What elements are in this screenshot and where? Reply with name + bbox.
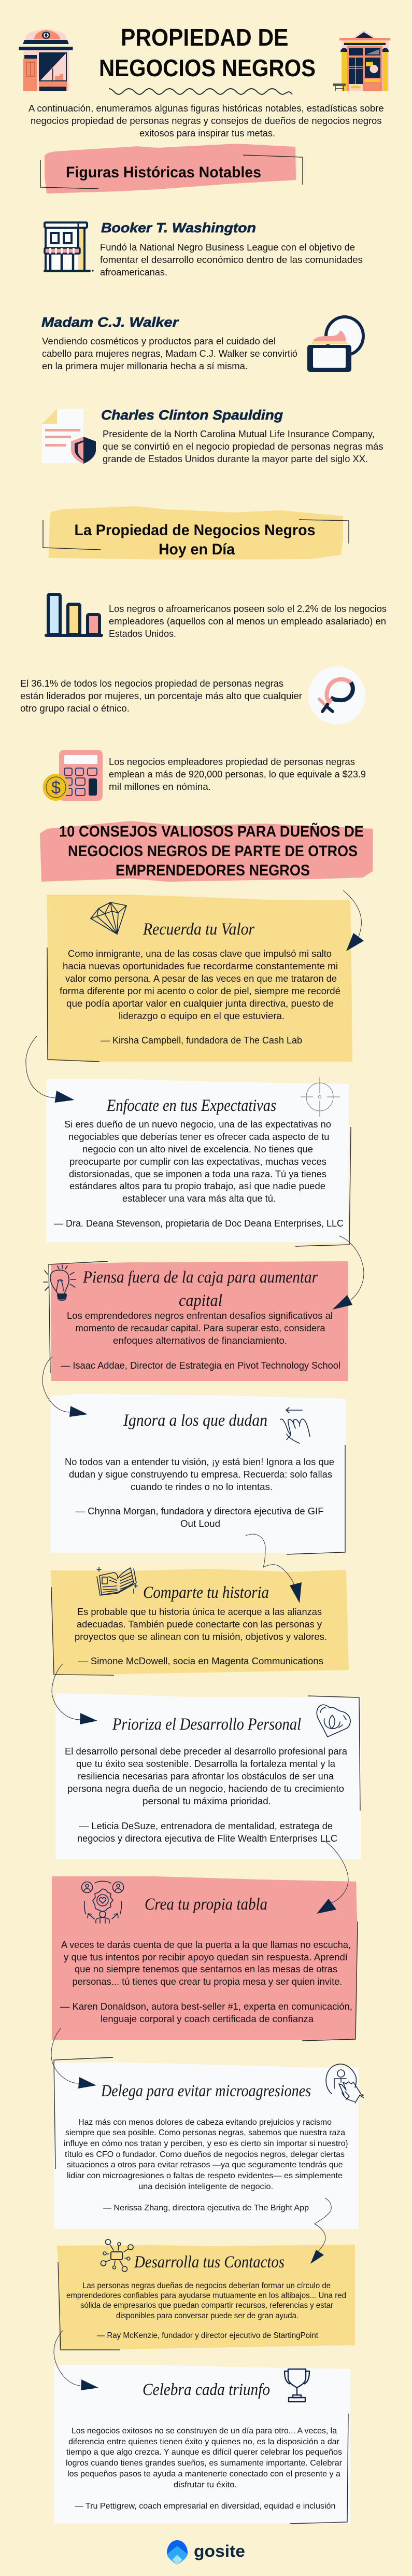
description: Vendiendo cosméticos y productos para el cuidado del xyxy=(42,336,276,346)
tip text: proyectos que se alinean con tu misión, objetivos y valores. xyxy=(75,1632,327,1642)
tip text: los pequeños pasos te ayuda a mantenerte conectado con el presente y a xyxy=(67,2470,340,2478)
panel: tip 3 piensa fuera de la caja xyxy=(44,1261,348,1381)
tip text: y que tus intentos por recibir apoyo quedan sin respuesta. Aprendí xyxy=(64,1952,348,1962)
tip text: negocios y directora ejecutiva de Flite Wealth Enterprises LLC xyxy=(77,1833,337,1844)
tip text: — Leticia DeSuze, entrenadora de mentalidad, estratega de xyxy=(79,1821,333,1831)
tip text: Las personas negras dueñas de negocios deberían formar un círculo de xyxy=(82,2281,331,2290)
panel: tip 5 comparte tu historia xyxy=(51,1567,349,1675)
icon: building xyxy=(44,222,94,272)
icon: heart with lotus xyxy=(317,1705,350,1737)
tip text: Es probable que tu historia única te acerque a las alianzas xyxy=(77,1607,322,1617)
description: en la primera mujer millonaria hecha a sí misma. xyxy=(42,361,248,371)
stat text xyxy=(20,678,302,714)
stat text: están liderados por mujeres, un porcentaje más alto que cualquier xyxy=(20,691,302,701)
tip title: Prioriza el Desarrollo Personal xyxy=(112,1715,301,1734)
tip text: — Kirsha Campbell, fundadora de The Cash Lab xyxy=(101,1035,302,1046)
tip text: Como inmigrante, una de las cosas clave que impulsó mi salto xyxy=(68,949,332,959)
tip title: Celebra cada triunfo xyxy=(143,2380,270,2399)
name: Booker T. Washington xyxy=(101,220,256,235)
arrow: tip 4 to 5 xyxy=(246,1534,302,1603)
arrow: tip 9 to 10 xyxy=(54,2330,98,2390)
description: fomentar el desarrollo económico dentro de las comunidades xyxy=(100,255,363,265)
tip text: liderazgo o equipo en el que estuviera. xyxy=(119,1011,285,1021)
section heading: 10 consejos: NEGOCIOS NEGROS DE PARTE DE OTROS xyxy=(68,843,358,860)
tip text: Out Loud xyxy=(180,1519,220,1529)
tip text: situaciones a otros para evitar retrasos —ya que seguramente tendrás que xyxy=(67,2161,343,2169)
tip text: logros cuando tienes grandes sueños, es sumamente importante. Celebrar xyxy=(66,2459,343,2468)
wave divider xyxy=(109,89,292,94)
icon: logo pin xyxy=(167,2540,188,2565)
logo: gosite xyxy=(167,2540,245,2565)
tip text: Haz más con menos dolores de cabeza evitando prejuicios y racismo xyxy=(78,2118,332,2127)
name: Madam C.J. Walker xyxy=(41,314,179,330)
tip text xyxy=(66,2281,346,2340)
stat text: empleadores (aquellos con al menos un empleado asalariado) en xyxy=(109,616,386,626)
icon: calculator and coin xyxy=(42,750,103,801)
tip text: disfrutar tu éxito. xyxy=(174,2481,237,2489)
tip title: Comparte tu historia xyxy=(143,1583,269,1602)
icon: people and gear xyxy=(82,1881,123,1923)
tip title: Recuerda tu Valor xyxy=(143,920,254,939)
section heading: 10 consejos: 10 CONSEJOS VALIOSOS PARA DUEÑOS DE xyxy=(59,823,364,840)
title: NEGOCIOS NEGROS xyxy=(99,54,316,81)
arrow: tip 7 to 8 xyxy=(51,2028,96,2088)
icon: cream jar and mirror xyxy=(307,317,363,372)
tip text xyxy=(65,1746,348,1844)
tip text: Si eres dueño de un nuevo negocio, una de las expectativas no xyxy=(64,1119,331,1130)
panel: tip 7 crea tu propia tabla xyxy=(52,1876,358,2041)
description xyxy=(42,336,297,371)
tip text: título es CFO o fundador. Como dueños de negocios negros, delegar ciertas xyxy=(65,2150,345,2159)
section heading: figuras históricas: Figuras Históricas Notables xyxy=(66,164,261,181)
tip text: distorsionadas, que se imponen a toda una raza. Tú ya tienes xyxy=(69,1169,326,1179)
stat text: emplean a más de 920,000 personas, lo que equivale a $23.9 xyxy=(109,769,366,779)
tip text: negocio con un alto nivel de excelencia. No tienes que xyxy=(82,1144,313,1154)
tip title: Delega para evitar microagresiones xyxy=(101,2082,311,2100)
tip text: preocuparte por cumplir con las expectativas, muchas veces xyxy=(69,1157,326,1167)
arrow: tip 8 to 9 xyxy=(310,2198,331,2264)
name: Charles Clinton Spaulding xyxy=(101,407,283,423)
tip text: hacia nuevas oportunidades fue recordarme constantemente mi xyxy=(63,961,338,971)
tip text: influye en cómo nos tratan y perciben, y eso es cierto sin importar si nuestro} xyxy=(64,2139,349,2148)
panel: tip 9 desarrolla tus contactos xyxy=(57,2239,355,2350)
tip text: — Dra. Deana Stevenson, propietaria de Doc Deana Enterprises, LLC xyxy=(54,1218,344,1229)
tip text: estándares altos para tu propio trabajo, así que nadie puede xyxy=(69,1181,325,1191)
section heading: 10 consejos xyxy=(40,821,373,882)
tip text: enfoques alternativos de financiamiento. xyxy=(113,1335,287,1346)
icon: diamond xyxy=(91,902,126,934)
description: cabello para mujeres negras, Madam C.J. Walker se convirtió xyxy=(42,349,297,359)
stat: 920,000 xyxy=(42,750,366,801)
arrow: tip 3 to 4 xyxy=(42,1357,88,1417)
tip title: Crea tu propia tabla xyxy=(145,1895,267,1914)
tip text: — Karen Donaldson, autora best-seller #1, experta en comunicación, xyxy=(60,2001,352,2012)
tip text: lenguaje corporal y coach certificada de confianza xyxy=(101,2014,314,2024)
panel: tip 8 delega xyxy=(54,2057,364,2229)
section heading: hoy en día: Hoy en Día xyxy=(159,541,235,558)
description: Presidente de la North Carolina Mutual Life Insurance Company, xyxy=(103,429,375,439)
panel: tip 4 ignora a los que dudan xyxy=(51,1394,346,1554)
tip text: diferencia entre quienes tienen éxito y quienes no, es la disposición a dar xyxy=(68,2438,340,2446)
icon: bar chart xyxy=(45,594,103,637)
icon: crosshair xyxy=(301,1077,340,1117)
tip text: establecer una vara más alta que tú. xyxy=(122,1193,276,1204)
tip text: — Isaac Addae, Director de Estrategia en Pivot Technology School xyxy=(61,1360,340,1371)
tip text: — Nerissa Zhang, directora ejecutiva de The Bright App xyxy=(103,2204,309,2212)
stat text: Los negocios empleadores propiedad de personas negras xyxy=(109,757,355,767)
tip text: — Chynna Morgan, fundadora y directora ejecutiva de GIF xyxy=(76,1506,323,1516)
tip text: tiempo a que algo crezca. Y aunque es difícil querer celebrar los pequeños xyxy=(66,2448,342,2457)
tip text xyxy=(75,1607,327,1666)
tip text: que no siempre tenemos que sentarnos en las mesas de otras xyxy=(75,1964,337,1974)
icon: left storefront xyxy=(19,29,73,91)
tip text: valor como persona. A pesar de las veces en que me trataron de xyxy=(65,973,337,984)
stat text: El 36.1% de todos los negocios propiedad de personas negras xyxy=(20,678,283,689)
panel: Booker T. Washington xyxy=(44,220,363,277)
intro text: A continuación, enumeramos algunas figuras históricas notables, estadísticas sobre xyxy=(29,103,384,114)
tip title: Enfocate en tus Expectativas xyxy=(106,1096,276,1115)
tip text: negociables que deberías tener es ofrecer cada aspecto de tu xyxy=(68,1132,330,1142)
panel: tip 2 enfócate xyxy=(46,1077,351,1246)
tip text: Los emprendedores negros enfrentan desafíos significativos al xyxy=(67,1311,333,1321)
tip text xyxy=(65,1457,334,1529)
tip text: — Ray McKenzie, fundador y director ejecutivo de StartingPoint xyxy=(97,2331,319,2340)
intro text: exitosos para inspirar tus metas. xyxy=(139,128,275,138)
description xyxy=(103,429,383,464)
arrow: tip 6 to 7 xyxy=(317,1841,348,1914)
tip text: resiliencia necesarias para afrontar los obstáculos de ser una xyxy=(78,1771,334,1781)
stat text xyxy=(109,757,366,792)
tip text: siempre que sea posible. Como personas negras, sabemos que nuestra raza xyxy=(65,2128,345,2137)
icon: light bulb xyxy=(44,1265,76,1301)
tip text: disponibles para conversar puede ser de gran ayuda. xyxy=(116,2312,299,2320)
stat text: otro grupo racial o étnico. xyxy=(20,703,130,714)
icon: right storefront xyxy=(333,30,390,91)
intro text: negocios propiedad de personas negras y consejos de dueños de negocios negros xyxy=(31,116,381,126)
title: PROPIEDAD DE xyxy=(121,24,288,51)
tip text xyxy=(66,2427,343,2511)
icon: pointing hand xyxy=(280,1408,310,1443)
tip text: emprendedores confiables para ayudarse mutuamente en los altibajos... Una red xyxy=(66,2291,346,2300)
stat text: Los negros o afroamericanos poseen solo el 2.2% de los negocios xyxy=(109,604,387,614)
stat: 36.1% xyxy=(20,666,365,725)
tip text: lidiar con microagresiones o faltas de respeto evidentes— es simplemente xyxy=(67,2171,343,2180)
tip text: Los negocios exitosos no se construyen de un día para otro... A veces, la xyxy=(72,2427,337,2435)
tip title: Desarrolla tus Contactos xyxy=(134,2253,285,2272)
stat text xyxy=(109,604,387,639)
tip text: adecuadas. También puede conectarte con las personas y xyxy=(77,1619,322,1630)
arrow: tip 5 to 6 xyxy=(52,1664,97,1724)
tip title: Ignora a los que dudan xyxy=(123,1411,267,1430)
tip text: persona negra dueña de un negocio, haciendo de tu crecimiento xyxy=(67,1784,344,1794)
tip title: Piensa fuera de la caja para aumentar xyxy=(82,1268,318,1287)
tip text xyxy=(61,1311,340,1371)
tip text: momento de recaudar capital. Para superar esto, considera xyxy=(76,1323,325,1333)
arrow: tip 2 to 3 xyxy=(333,1236,364,1310)
panel: Madam C.J. Walker xyxy=(41,314,363,372)
title xyxy=(99,24,316,81)
description xyxy=(100,242,363,277)
header xyxy=(19,24,390,138)
icon: female symbol xyxy=(308,666,365,725)
section heading: figuras históricas xyxy=(40,144,303,193)
tip text: personas... tú tienes que crear tu propia mesa y ser quien invite. xyxy=(73,1976,342,1987)
tip text: sólida de empresarios que puedan compartir recursos, referencias y estar xyxy=(80,2301,333,2310)
icon: calculator and coin: $ xyxy=(51,778,61,798)
description: afroamericanas. xyxy=(100,267,167,277)
tip text: — Tru Pettigrew, coach empresarial en diversidad, equidad e inclusión xyxy=(75,2502,336,2511)
icon: open book xyxy=(97,1567,137,1595)
panel: tip 3 piensa fuera de la caja: capital xyxy=(179,1291,222,1310)
tip text: A veces te darás cuenta de que la puerta a la que llamas no escucha, xyxy=(61,1940,351,1950)
description: que se convirtió en el negocio propiedad de personas negras más xyxy=(103,441,383,452)
tip text: personal tu máxima prioridad. xyxy=(143,1796,271,1806)
stat text: mil millones en nómina. xyxy=(109,782,211,792)
icon: network xyxy=(101,2239,133,2272)
tip text: una decisión inteligente de negocio. xyxy=(138,2182,273,2191)
icon: document and shield xyxy=(42,409,96,464)
panel: tip 1 recuerda tu valor xyxy=(47,895,352,1062)
tip text: que podía aportar valor en cualquier junta directiva, puesto de xyxy=(66,998,334,1009)
tip text xyxy=(64,2118,349,2212)
tip text: No todos van a entender tu visión, ¡y está bien! Ignora a los que xyxy=(65,1457,334,1467)
stat: 2.2% xyxy=(45,594,387,639)
tip text: — Simone McDowell, socia en Magenta Communications xyxy=(78,1656,323,1666)
panel: Charles Clinton Spaulding xyxy=(42,407,383,464)
tip text xyxy=(54,1119,344,1229)
arrow: tip 1 to 2 xyxy=(343,890,364,951)
section heading: 10 consejos: EMPRENDEDORES NEGROS xyxy=(116,862,310,879)
arrow: tip 1 to tip 2 left xyxy=(26,1036,75,1103)
tip text: que tu éxito sea sostenible. Desarrolla la fortaleza mental y la xyxy=(76,1759,336,1769)
tip text: forma diferente por mi acento o color de piel, siempre me recordé xyxy=(60,986,340,996)
tip text: dudan y sigue construyendo tu empresa. Recuerda: solo fallas xyxy=(69,1469,332,1480)
description: grande de Estados Unidos durante la mayor parte del siglo XX. xyxy=(103,454,368,464)
section heading: hoy en día: La Propiedad de Negocios Negros xyxy=(75,522,315,539)
tip text xyxy=(60,949,340,1046)
panel: tip 10 celebra cada triunfo xyxy=(54,2365,350,2524)
tip text: El desarrollo personal debe preceder al desarrollo profesional para xyxy=(65,1746,348,1757)
tip text: cuando te rindes o no lo intentas. xyxy=(131,1482,273,1492)
icon: person and hand xyxy=(326,2064,364,2103)
stat text: Estados Unidos. xyxy=(109,629,176,639)
icon: trophy xyxy=(285,2369,309,2402)
intro text xyxy=(29,103,384,138)
tip text xyxy=(60,1940,352,2024)
section heading: hoy en día xyxy=(43,506,349,560)
description: Fundó la National Negro Business League con el objetivo de xyxy=(100,242,355,253)
logo wordmark: gosite xyxy=(194,2542,245,2560)
panel: tip 6 prioriza xyxy=(56,1693,361,1859)
